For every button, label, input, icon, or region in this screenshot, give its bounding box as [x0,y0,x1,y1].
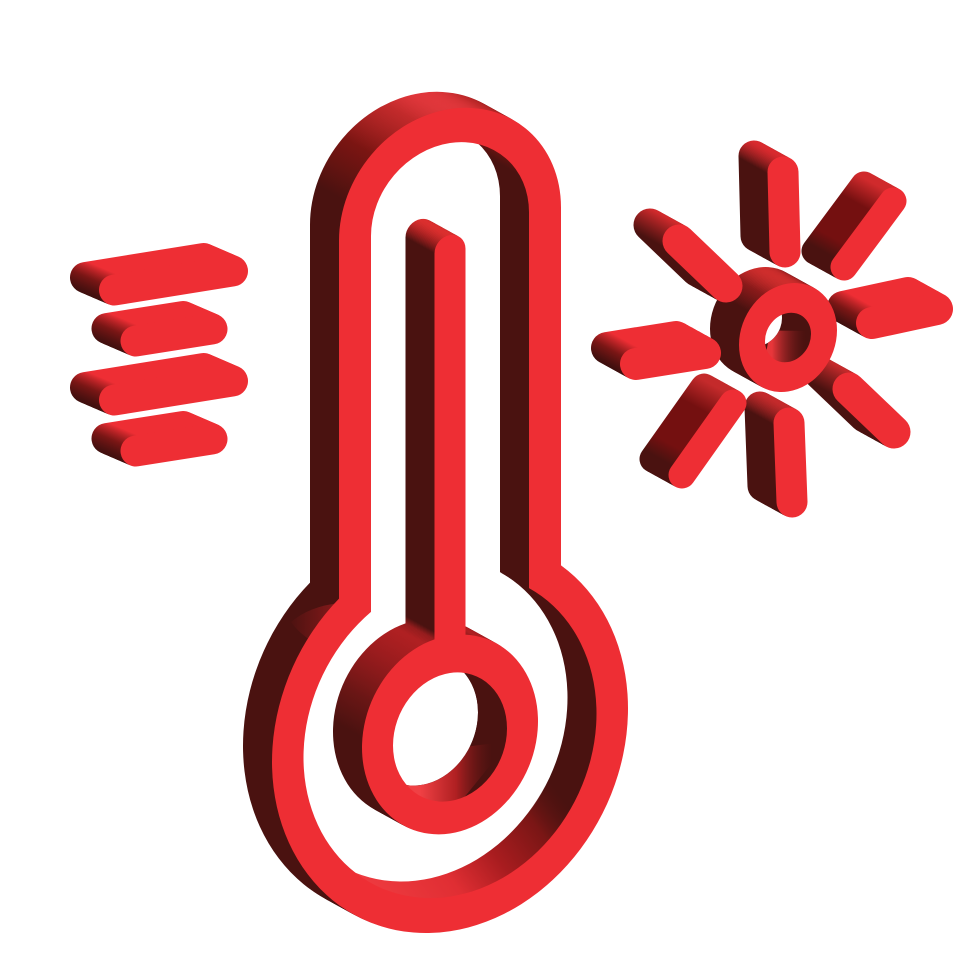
thermometer front outline [272,82,628,958]
sun rays extrusion [607,156,936,501]
sun ring front [739,276,837,399]
bars extrusion [86,258,231,450]
sun ring extrusion [710,256,836,402]
thermometer outer shell extrusion [243,62,627,961]
icon: sun [607,156,937,502]
sun rays front [636,172,937,502]
bars front [114,271,232,451]
thermometer stem and bulb extrusion [333,202,537,850]
icon: thermometer [243,62,628,961]
thermometer front stem and bulb [362,222,538,847]
thermometer shoulder highlight [291,603,345,640]
icon: four cold bars [86,258,232,451]
